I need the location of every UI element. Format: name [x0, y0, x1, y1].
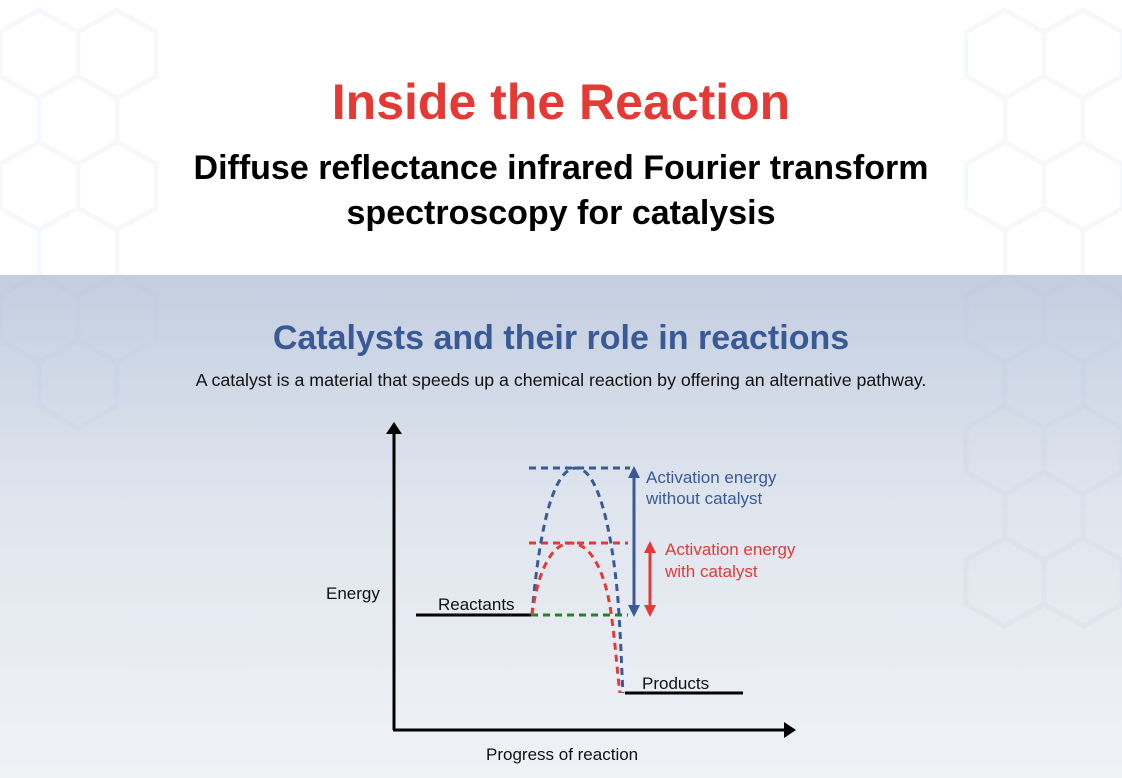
- section heading: Catalysts and their role in reactions: [273, 319, 849, 357]
- title: Inside the Reaction: [332, 74, 790, 130]
- subtitle: Diffuse reflectance infrared Fourier transform: [194, 149, 928, 187]
- labels: with catalyst: [664, 562, 758, 581]
- labels: [326, 468, 796, 764]
- background band: [0, 275, 1122, 778]
- labels: Reactants: [438, 595, 515, 614]
- description: A catalyst is a material that speeds up a chemical reaction by offering an alternative pathway.: [196, 370, 926, 390]
- labels: Activation energy: [665, 540, 796, 559]
- labels: Energy: [326, 584, 380, 603]
- subtitle: spectroscopy for catalysis: [347, 194, 775, 232]
- reactants and products levels: [416, 615, 743, 693]
- dashed guide lines: [529, 468, 630, 693]
- subtitle: [194, 149, 928, 232]
- labels: without catalyst: [645, 489, 762, 508]
- arrows: [634, 476, 650, 607]
- labels: Progress of reaction: [486, 745, 638, 764]
- axes: [386, 422, 796, 738]
- labels: Activation energy: [646, 468, 777, 487]
- labels: Products: [642, 674, 709, 693]
